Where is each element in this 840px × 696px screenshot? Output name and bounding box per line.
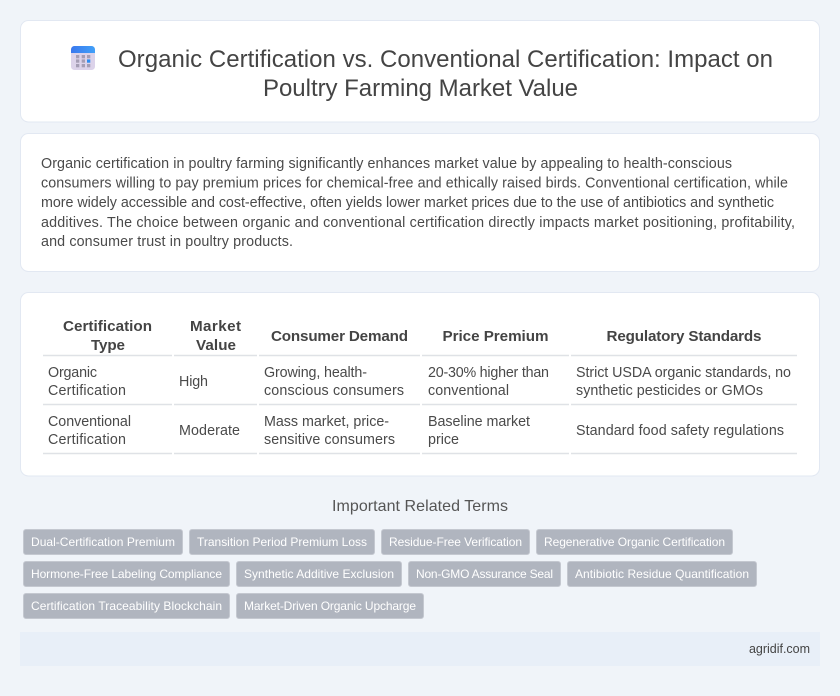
tags: related terms: Non-GMO Assurance Seal [416,567,553,581]
table header: Price Premium [442,328,548,345]
panel: summary text: Organic certification in poultry farming significantly enhances market value by appealing to health-conscious [41,156,732,172]
panel: comparison table [20,292,820,476]
footer: source [20,632,820,666]
table row: conventional certification: Standard food safety regulations [576,423,784,439]
table row: organic certification: Certification [48,383,126,399]
panel: summary text [20,134,820,272]
table row: organic certification: synthetic pesticides or GMOs [576,383,763,399]
table row: organic certification: 20-30% higher than [428,365,549,381]
panel: summary text: and consumer trust in poultry products. [41,234,293,250]
table header: Value [196,337,236,354]
panel: summary text: more widely accessible and cost-effective, often yields lower market prices due to the use of antibiotics and synthetic [41,195,774,211]
table row: conventional certification: Conventional [48,414,131,430]
table row: conventional certification: Moderate [179,423,240,439]
table header [63,318,762,354]
table row: conventional certification: sensitive consumers [264,432,395,448]
table header: Market [190,318,241,335]
table row: organic certification: Organic [48,365,97,381]
tags: related terms: Hormone-Free Labeling Compliance [31,567,222,581]
title [118,46,773,102]
heading: important related terms: Important Related Terms [332,498,508,515]
table row: conventional certification [48,414,784,448]
panel: summary text: additives. The choice between organic and conventional certification directly impacts market positioning, profitability, [41,215,795,231]
tags: related terms: Market-Driven Organic Upcharge [244,599,416,613]
table row: organic certification [48,365,791,399]
tags: related terms: Regenerative Organic Certification [544,535,725,549]
tags: related terms: Dual-Certification Premium [31,535,175,549]
table row: organic certification: conventional [428,383,509,399]
panel: summary text: consumers willing to pay premium prices for chemical-free and ethically raised birds. Conventional certification, while [41,176,788,192]
tags: related terms: Synthetic Additive Exclusion [244,567,394,581]
icon: calendar [71,46,95,70]
tags: related terms: Antibiotic Residue Quantification [575,567,749,581]
table header: Regulatory Standards [606,328,762,345]
table row: conventional certification: Certification [48,432,126,448]
panel: title card [20,20,820,122]
tags: related terms: Residue-Free Verification [389,535,522,549]
title: Organic Certification vs. Conventional Certification: Impact on [118,46,773,73]
tags: related terms [24,530,756,618]
table row: conventional certification: Baseline market [428,414,530,430]
table row: conventional certification: price [428,432,459,448]
footer: source: agridif.com [749,642,810,656]
tags: related terms: Certification Traceability Blockchain [31,599,222,613]
table row: conventional certification: Mass market, price- [264,414,389,430]
table header: Type [91,337,125,354]
table row: organic certification: Strict USDA organic standards, no [576,365,791,381]
table header: Consumer Demand [271,328,408,345]
table row: organic certification: High [179,374,208,390]
table header: Certification [63,318,152,335]
table row: organic certification: conscious consumers [264,383,404,399]
title: Poultry Farming Market Value [263,75,578,102]
tags: related terms: Transition Period Premium Loss [197,535,367,549]
table row: organic certification: Growing, health- [264,365,367,381]
